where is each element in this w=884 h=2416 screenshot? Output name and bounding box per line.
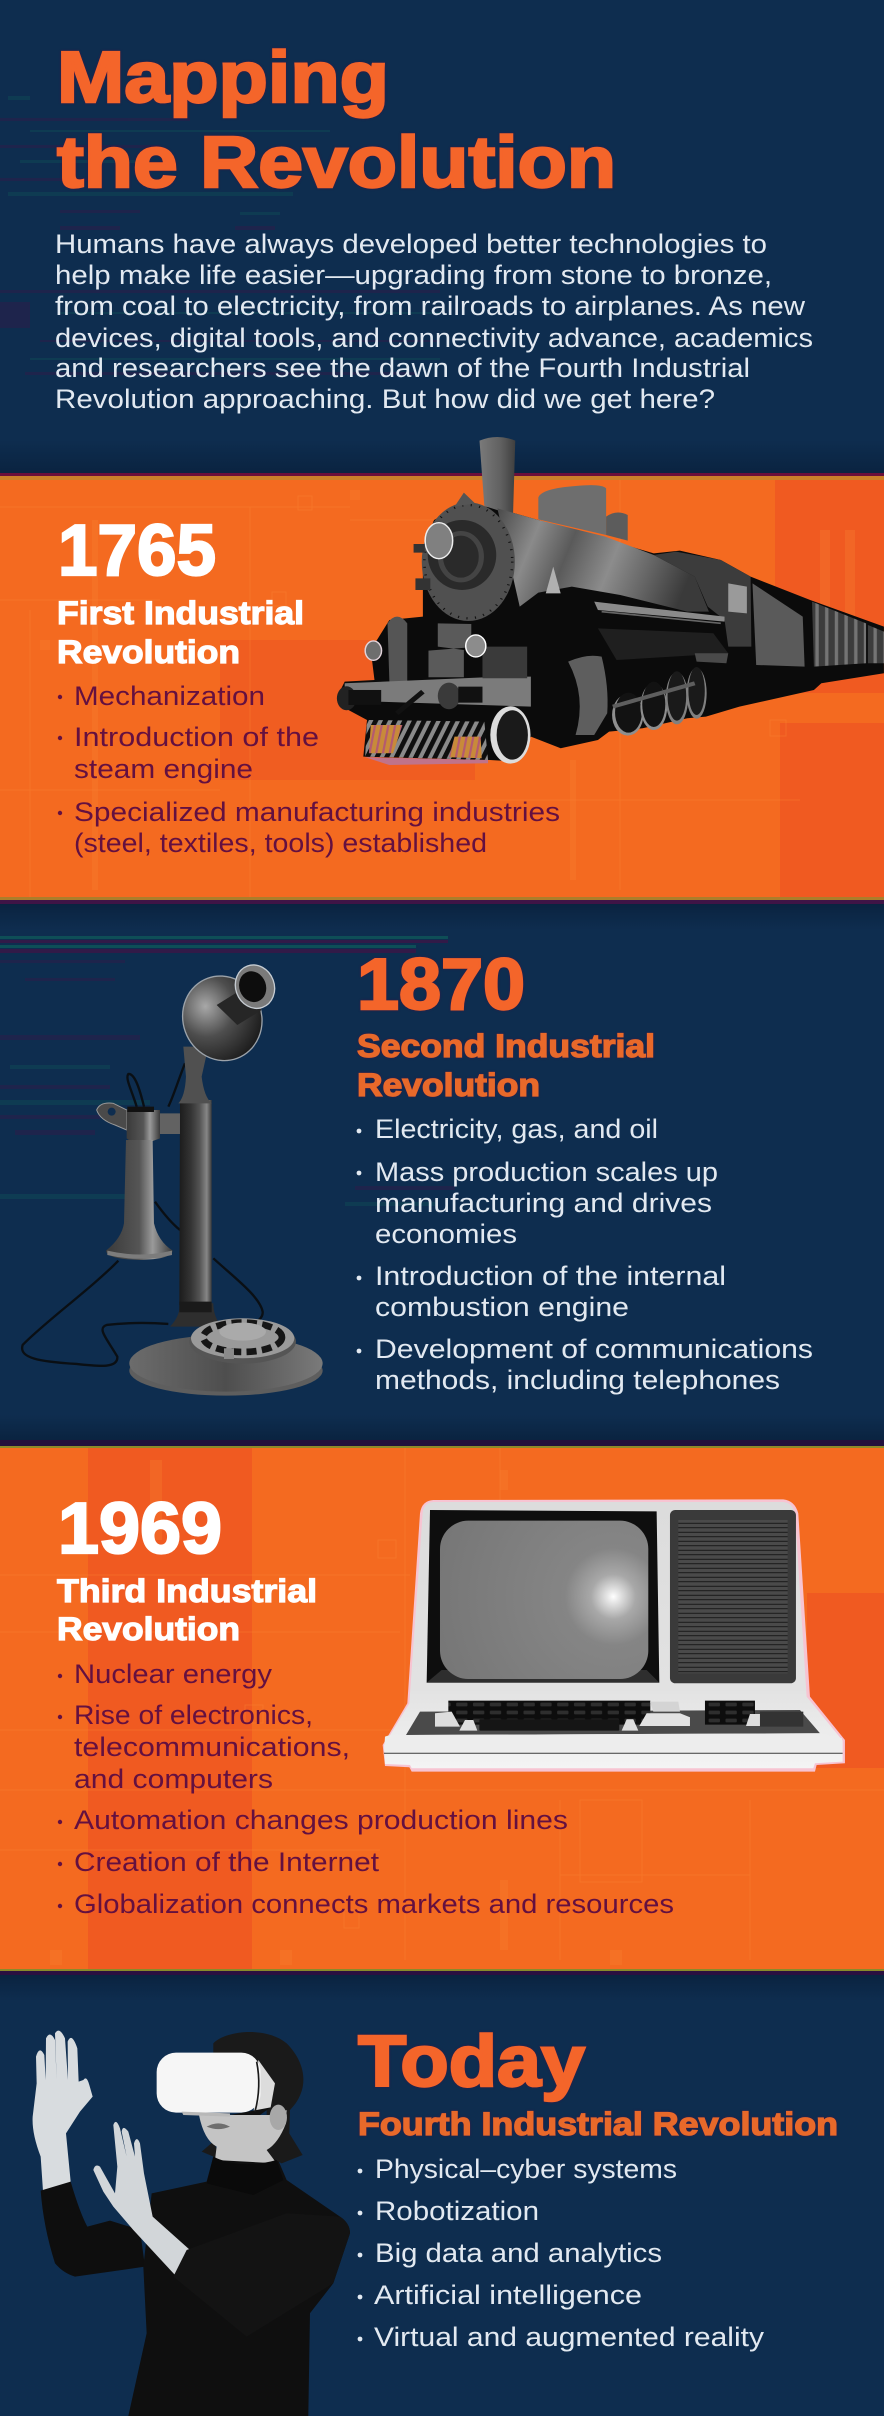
intro paragraph: [55, 229, 813, 414]
title: the Revolution: [57, 123, 616, 203]
panel: intro: [0, 38, 884, 474]
intro paragraph: Revolution approaching. But how did we get here?: [55, 384, 715, 414]
bullet list: third revolution: Nuclear energy: [74, 1659, 273, 1689]
heading: third industrial revolution: Third Industrial: [57, 1573, 317, 1609]
bullet list: first revolution: Introduction of the: [74, 722, 319, 752]
title: Mapping: [57, 38, 389, 118]
bullet list: third revolution: and computers: [74, 1764, 273, 1794]
bullet list: third revolution: Automation changes production lines: [74, 1805, 568, 1835]
bullet list: first revolution: (steel, textiles, tools) established: [74, 828, 487, 858]
bullet list: third revolution: telecommunications,: [74, 1732, 350, 1762]
intro paragraph: help make life easier—upgrading from stone to bronze,: [55, 260, 772, 290]
icon: woman wearing VR headset: [33, 2031, 350, 2416]
intro paragraph: from coal to electricity, from railroads to airplanes. As new: [55, 291, 806, 321]
intro paragraph: Humans have always developed better technologies to: [55, 229, 767, 259]
bullet list: fourth revolution: [358, 2154, 765, 2352]
bullet list: third revolution: Creation of the Internet: [74, 1847, 380, 1877]
heading: second industrial revolution: Second Industrial: [357, 1028, 655, 1064]
panel: third industrial revolution: [0, 1415, 884, 2001]
bullet list: third revolution: Globalization connects markets and resources: [74, 1889, 674, 1919]
heading: first industrial revolution: Revolution: [57, 634, 240, 670]
year 1969: 1969: [58, 1489, 222, 1569]
icon: steam locomotive: [337, 437, 884, 765]
bullet list: first revolution: [58, 681, 560, 858]
bullet list: second revolution: Development of communications: [375, 1334, 813, 1364]
bullet list: third revolution: Rise of electronics,: [74, 1700, 313, 1730]
bullet list: third revolution: [58, 1659, 674, 1919]
bullet list: fourth revolution: Big data and analytics: [375, 2238, 662, 2268]
bullet list: fourth revolution: Artificial intelligence: [374, 2280, 642, 2310]
bullet list: fourth revolution: Virtual and augmented reality: [374, 2322, 765, 2352]
intro paragraph: devices, digital tools, and connectivity advance, academics: [55, 323, 813, 353]
title: [57, 38, 616, 203]
bullet list: second revolution: combustion engine: [375, 1292, 629, 1322]
bullet list: first revolution: Specialized manufacturing industries: [74, 797, 560, 827]
panel: first industrial revolution: [0, 437, 884, 930]
year 1765: 1765: [58, 511, 216, 591]
bullet list: fourth revolution: Physical–cyber systems: [375, 2154, 677, 2184]
bullet list: second revolution: economies: [375, 1219, 517, 1249]
panel: second industrial revolution: [0, 936, 813, 1396]
bullet list: first revolution: Mechanization: [74, 681, 265, 711]
icon: candlestick telephone: [22, 959, 323, 1396]
heading: first industrial revolution: First Industrial: [57, 595, 304, 631]
panel: fourth industrial revolution: [33, 2022, 838, 2416]
heading: third industrial revolution: [57, 1573, 317, 1647]
icon: retro computer terminal: [383, 1499, 845, 1772]
heading: second industrial revolution: Revolution: [357, 1067, 540, 1103]
bullet list: first revolution: steam engine: [74, 754, 253, 784]
bullet list: second revolution: Mass production scales up: [375, 1157, 718, 1187]
heading: today: Today: [358, 2022, 585, 2102]
heading: second industrial revolution: [357, 1028, 655, 1103]
bullet list: second revolution: methods, including telephones: [375, 1365, 780, 1395]
heading: fourth industrial revolution: Fourth Industrial Revolution: [358, 2106, 838, 2142]
heading: first industrial revolution: [57, 595, 304, 670]
intro paragraph: and researchers see the dawn of the Fourth Industrial: [55, 353, 750, 383]
heading: third industrial revolution: Revolution: [57, 1611, 240, 1647]
bullet list: second revolution: manufacturing and drives: [375, 1188, 712, 1218]
bullet list: fourth revolution: Robotization: [375, 2196, 539, 2226]
bullet list: second revolution: Electricity, gas, and oil: [375, 1114, 658, 1144]
bullet list: second revolution: [357, 1114, 813, 1395]
bullet list: second revolution: Introduction of the internal: [375, 1261, 726, 1291]
year 1870: 1870: [357, 945, 525, 1025]
